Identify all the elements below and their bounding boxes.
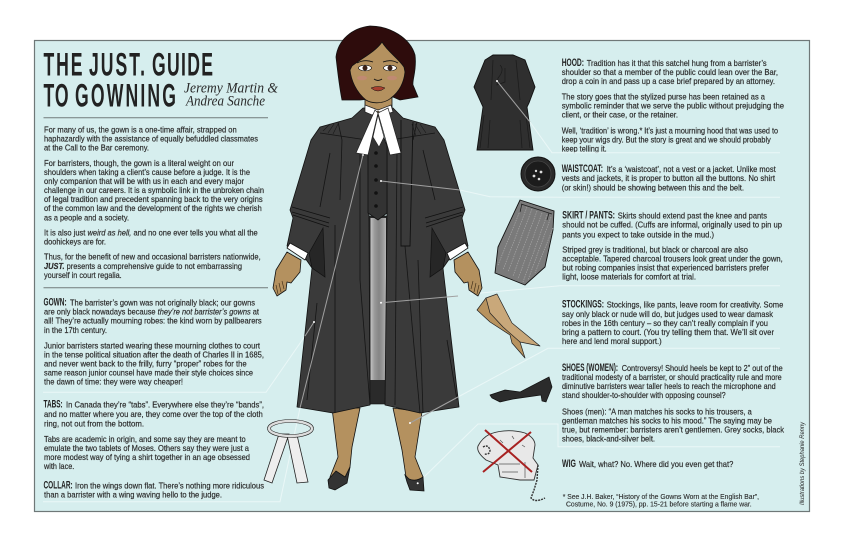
byline: authors: Jeremy Martin & [184,80,278,96]
tabs and wing collar [356,105,401,155]
text block: collar: COLLAR: [44,479,73,491]
text block: wig: WIG [562,458,576,470]
text block: shoes [562,362,785,444]
byline: authors [184,80,278,110]
waistcoat [368,122,387,220]
icon: button [521,157,555,191]
text block: introduction: as a people and a society. [44,213,129,222]
text block: introduction: shoulders when taking a client’s cause before a judge. It is the [44,168,250,177]
text block: gown: in the tense political situation after the death of Charles II in 1685, [44,351,264,360]
text block: introduction: JUST. presents a comprehensive guide to not embarrassing [44,262,242,271]
text block: skirt and pants: pants you expect to take outside in the mud.) [562,230,714,239]
text block: tabs: ring, not out from the bottom. [44,419,144,428]
icon: black court shoe [490,377,552,402]
text block: wig [562,458,734,470]
text block: introduction [44,126,264,280]
text block: hood: shoulder so that a member of the public could lean over the Bar, [562,68,778,77]
text block: shoes: shoes, black-and-silver belt. [562,435,655,444]
footnote: Costume, No. 9 (1975), pp. 15-21 before starting a flame war. [566,500,752,509]
text block: gown: same reason junior counsel have made their style choices since [44,369,253,378]
text block: shoes: gentleman matches his socks to his mood.” The saying may be [562,417,772,426]
title: GOWNING [75,79,176,114]
text block: hood: symbolic reminder that we serve the public without prejudging the [562,102,784,111]
text block: skirt and pants: should not be cuffed. (Cuffs are informal, originally used to pin up [562,221,782,230]
gown fold lines [307,122,457,413]
title [44,48,213,114]
text block: introduction: at the Call to the Bar ceremony. [44,143,149,152]
byline: authors: Andrea Sanche [185,94,265,110]
text block: skirt and pants: Striped grey is traditional, but black or charcoal are also [562,246,748,255]
shoes [328,467,424,491]
hair [336,26,418,100]
text block: gown: are only black nowadays because they’re not barrister’s gowns at [44,308,260,317]
text block: shoes: stand shoulder-to-shoulder with opposing counsel? [562,391,726,400]
illustration credit: Illustrations by Stephanie Renny [799,421,806,505]
text block: hood: keep your wigs dry. But the story is great and we should probably [562,135,772,144]
text block: shoes: Shoes (men): “A man matches his socks to his trousers, a [562,407,752,416]
text block: tabs [43,399,264,471]
text block: tabs: more modest way of tying a shirt together in an age obsessed [44,453,250,462]
text block: stockings: say only black or nude will do, but judges used to wear damask [562,310,774,319]
text block: gown: The barrister’s gown was not originally black; our gowns [70,298,255,307]
legs and stockings [330,408,423,484]
text block: introduction: yourself in court regalia. [44,271,122,280]
text block: gown: and never went back to the frilly, furry “proper” robes for the [44,360,247,369]
text block: hood: drop a coin in and pass up a case brief prepared by an attorney. [562,77,775,86]
footnote [563,492,759,509]
text block: hood: The story goes that the stylized purse has been retained as a [562,93,765,102]
text block: skirt and pants: Skirts should extend past the knee and pants [618,211,767,220]
text block: stockings: bring a pattern to court. (You try telling them that. We’ll sit over [562,328,774,337]
text block: skirt and pants: acceptable. Tapered charcoal trousers look great under the gown, [562,255,783,264]
icon: hood [474,55,535,150]
dark sleeve panels [309,228,325,277]
text block: waistcoat: It’s a ‘waistcoat’, not a vest or a jacket. Unlike most [607,165,776,174]
shirt cuffs [287,243,468,260]
face [350,42,405,103]
text block: skirt and pants: SKIRT / PANTS: [562,209,615,221]
text block: hood [562,57,784,153]
text block: hood: HOOD: [562,57,584,69]
footnote: * See J.H. Baker, “History of the Gowns Worn at the English Bar”, [563,492,759,501]
text block: waistcoat [562,163,776,192]
text block: gown: GOWN: [44,296,67,308]
text block: stockings: here and lend moral support.) [562,337,662,346]
text block: gown [44,296,264,386]
icon: collar and bands [264,421,312,483]
text block: introduction: For barristers, though, the gown is a literal weight on our [44,159,234,168]
text block: waistcoat: (or skin!) should be showing between this and the belt. [562,183,744,192]
text block: shoes: diminutive barristers wear taller heels to reach the microphone and [562,382,776,391]
text block: stockings: STOCKINGS: [562,299,604,311]
hands [273,252,482,296]
text block: skirt and pants: but robing companies insist that experienced barristers prefer [562,264,769,273]
text block: tabs: TABS: [44,399,63,411]
figure: barrister in gown [273,26,482,491]
background panel [34,40,810,512]
text block: collar: than a barrister with a wing waving hello to the judge. [44,491,222,500]
text block: stockings [562,299,784,346]
text block: hood: client, or their case, or the retainer. [562,111,678,120]
skirt panel [369,216,387,404]
title: TO [44,79,69,114]
title: GUIDE [152,48,213,83]
text block: tabs: and no matter where you are, they come over the top of the cloth [44,410,263,419]
text block: introduction: For many of us, the gown is a one-time affair, strapped on [44,126,237,135]
text block: introduction: of legal tradition and precedent spanning back to the very origins [44,195,263,204]
text block: introduction: haphazardly with the assistance of equally befuddled classmates [44,135,258,144]
text block: skirt and pants [562,209,783,281]
text block: hood: Tradition has it that this satchel hung from a barrister’s [587,59,767,68]
title: JUST. [89,48,145,83]
icon: striped skirt [495,200,554,285]
neck [365,95,392,116]
text block: shoes: SHOES (WOMEN): [562,362,618,374]
text block: introduction: of the common law and the development of the rights we cherish [44,204,262,213]
text block: tabs: emulate the two tablets of Moses. Others say they were just a [44,444,249,453]
text block: stockings: Stockings, like pants, leave room for creativity. Some [607,301,784,310]
text block: waistcoat: WAISTCOAT: [562,163,603,175]
text block: skirt and pants: light, loose materials for comfort at trial. [562,272,696,281]
sleeve bands [292,207,463,227]
text block: collar: Iron the wings down flat. There’s nothing more ridiculous [75,481,264,490]
text block: introduction: only companion that will be with us in each and every major [44,177,244,186]
leader lines on background [43,122,780,502]
text block: tabs: In Canada they’re “tabs”. Everywhere else they’re “bands”, [66,401,264,410]
gown strap [401,120,413,246]
text block: introduction: It is also just weird as hell, and no one ever tells you what all the [44,228,258,237]
text block: gown: all! They’re actually mourning robes: the kind worn by pallbearers [44,317,262,326]
text block: stockings: robes in the 16th century – so they can’t really complain if you [562,319,768,328]
text block: introduction: doohickeys are for. [44,237,106,246]
text block: shoes: true, but remember: barristers aren’t gentlemen. Grey socks, black [562,426,785,435]
text block: hood: Well, ‘tradition’ is wrong.* It’s just a mourning hood that was used to [562,126,778,135]
text block: tabs: with lace. [43,462,74,471]
text block: shoes: Controversy! Should heels be kept to 2” out of the [622,364,783,373]
shoulder pleats [323,124,426,136]
text block: introduction: challenge in our careers. It is a symbolic link in the unbroken chain [44,186,264,195]
text block: tabs: Tabs are academic in origin, and some say they are meant to [44,435,246,444]
text block: shoes: traditional modesty of a barrister, or should practicality rule and more [562,373,782,382]
text block: gown: the dawn of time: they were way cheaper! [44,377,183,386]
gown body [287,108,468,413]
leader lines over figure [300,154,460,484]
text block: wig: Wait, what? No. Where did you even get that? [579,460,734,469]
title: THE [44,48,82,83]
text block: gown: in the 17th century. [44,326,107,335]
text block: hood: keep telling it. [562,144,607,153]
text block: gown: Junior barristers started wearing these mourning clothes to court [44,342,261,351]
icon: crossed-out wig [478,430,545,500]
icon: stockings [477,294,540,358]
text block: introduction: Thus, for the benefit of new and occasional barristers nationwide, [44,253,261,262]
text block: waistcoat: vests and jackets, it is proper to button all the buttons. No shirt [562,174,776,183]
text block: collar [44,479,264,500]
